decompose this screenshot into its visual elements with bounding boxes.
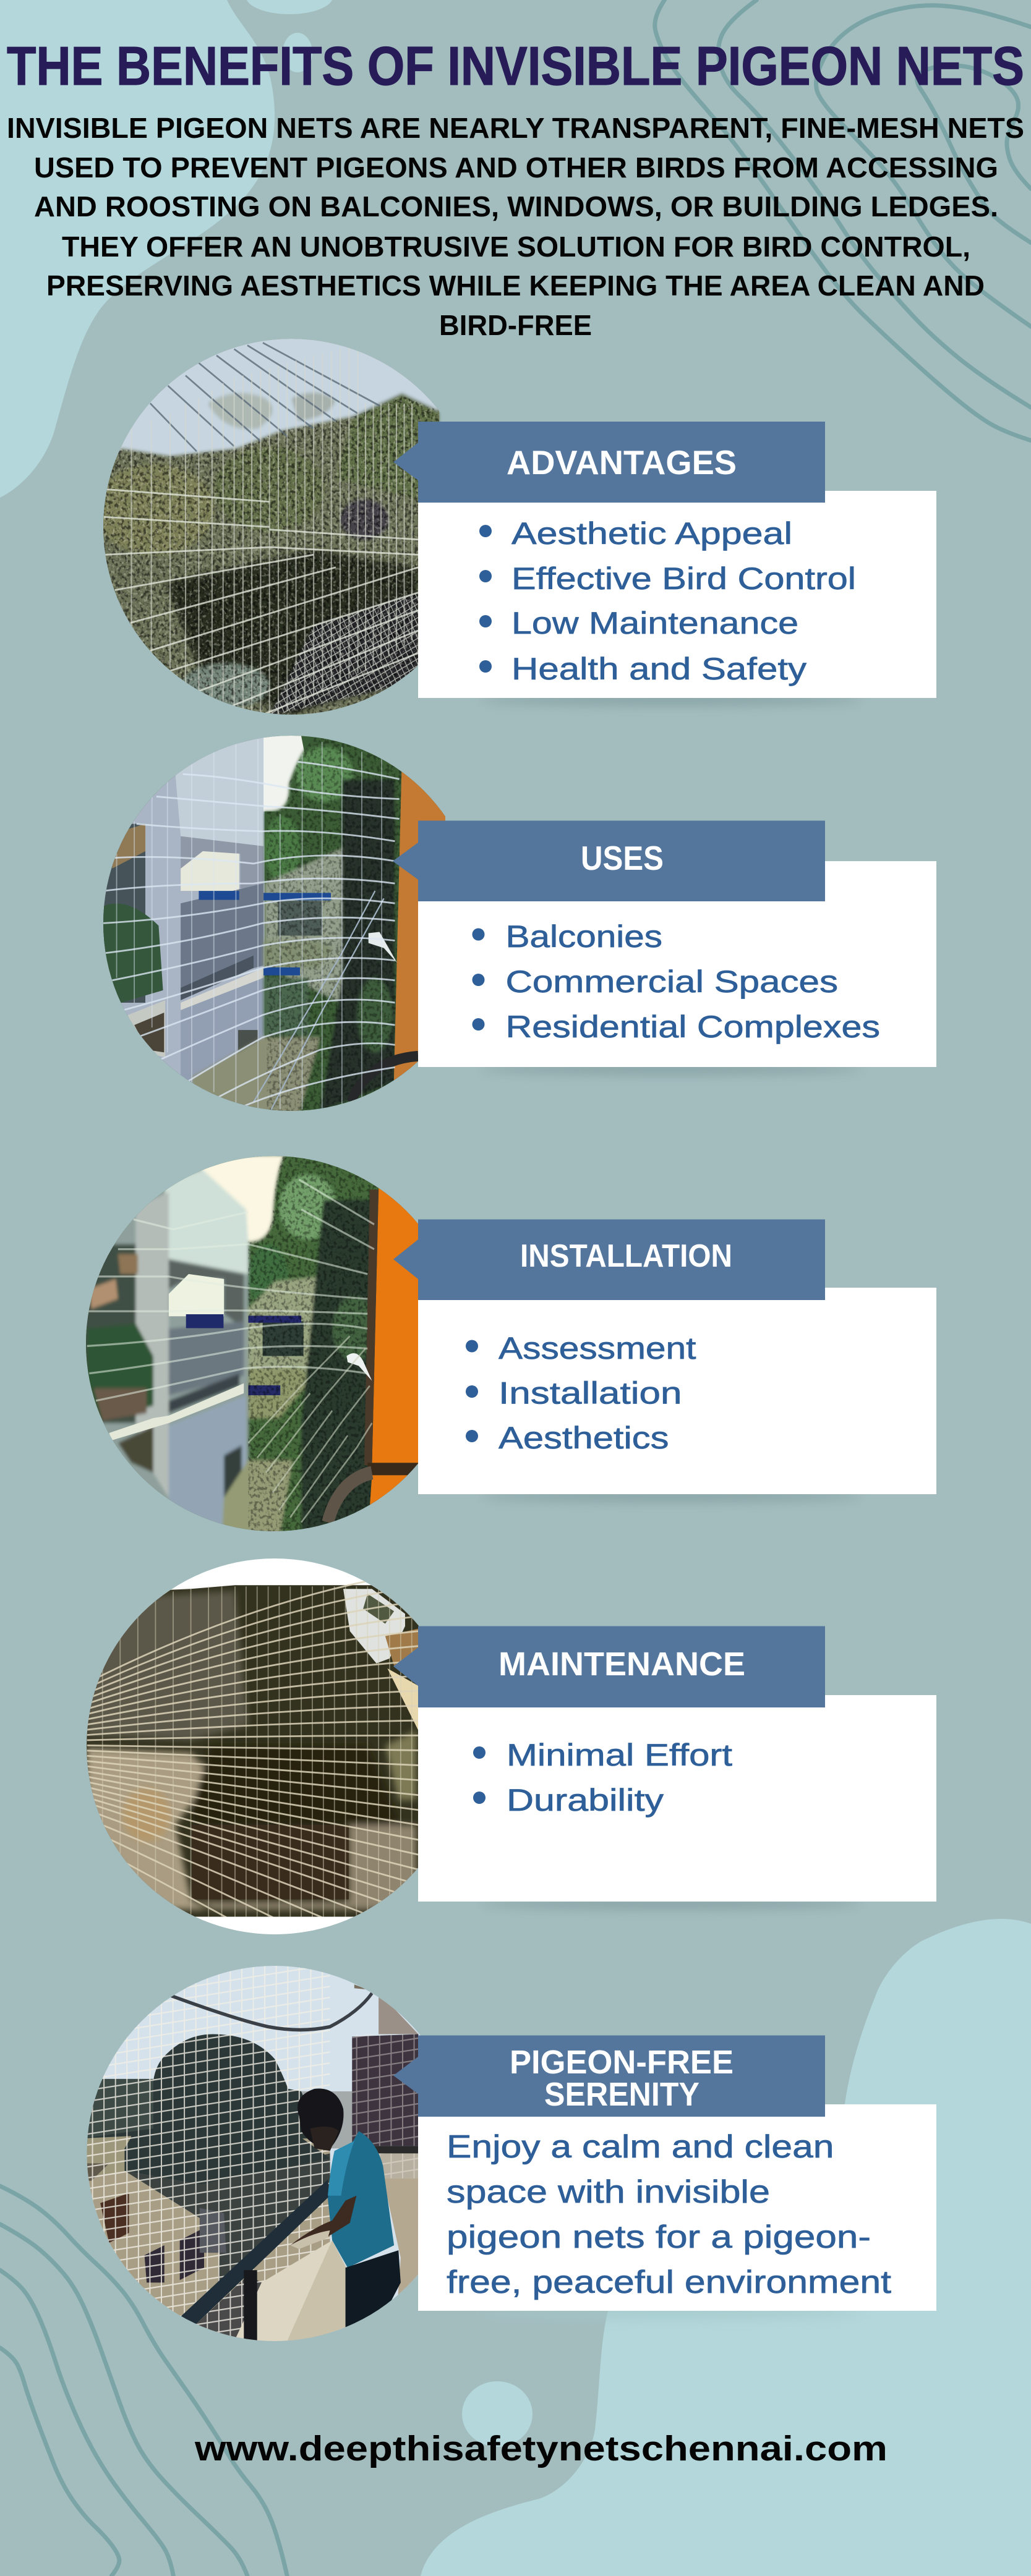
intro paragraph: THEY OFFER AN UNOBTRUSIVE SOLUTION FOR BIRD CONTROL,	[62, 231, 970, 263]
body text: serenity: free, peaceful environment	[447, 2264, 892, 2300]
body text: serenity: Enjoy a calm and clean	[447, 2129, 834, 2165]
ribbon: maintenance heading: MAINTENANCE	[498, 1646, 745, 1683]
card shadow	[479, 694, 863, 705]
photo: net over hillside	[93, 328, 439, 723]
ribbon: serenity heading: SERENITY	[544, 2076, 699, 2113]
ribbon: installation heading: INSTALLATION	[520, 1238, 732, 1274]
list: maintenance	[473, 1738, 732, 1817]
intro paragraph: AND ROOSTING ON BALCONIES, WINDOWS, OR BUILDING LEDGES.	[34, 190, 998, 223]
body text: serenity: pigeon nets for a pigeon-	[447, 2219, 871, 2255]
list: installation: Aesthetics	[498, 1421, 669, 1455]
list: uses: Balconies	[506, 919, 662, 954]
card: advantages list	[418, 491, 936, 698]
list: uses	[473, 919, 880, 1044]
photo: worker installing net on balcony	[80, 1960, 427, 2349]
intro paragraph	[7, 112, 1024, 341]
list: installation: Installation	[498, 1376, 682, 1411]
card shadow	[479, 2307, 863, 2318]
list: maintenance: Durability	[507, 1783, 664, 1817]
list: advantages: Low Maintenance	[511, 606, 798, 640]
ribbon: uses heading: USES	[581, 839, 664, 877]
list: advantages: Aesthetic Appeal	[511, 516, 792, 551]
ribbon: serenity heading: PIGEON-FREE	[510, 2044, 734, 2081]
card: maintenance list	[418, 1695, 936, 1902]
list: uses: Commercial Spaces	[506, 964, 838, 999]
panel: uses	[99, 729, 936, 1119]
list: advantages	[479, 516, 856, 686]
photo: close-up net	[87, 1558, 419, 1934]
body text: serenity: space with invisible	[447, 2174, 770, 2210]
photo: net with orange wall	[80, 1150, 427, 1539]
ribbon: maintenance heading	[393, 1626, 825, 1707]
ribbon: uses heading	[393, 821, 825, 901]
background blob: bottom right	[421, 1919, 1031, 2576]
panel: maintenance	[87, 1558, 936, 1934]
ribbon: advantages heading: ADVANTAGES	[507, 443, 737, 482]
list: installation: Assessment	[498, 1331, 696, 1366]
photo: net over courtyard	[99, 729, 445, 1119]
panel: installation	[80, 1150, 936, 1539]
card shadow	[479, 1490, 863, 1502]
ribbon: advantages heading	[393, 422, 825, 503]
body text: serenity	[447, 2129, 892, 2300]
card shadow	[479, 1898, 863, 1909]
card: uses list	[418, 861, 936, 1067]
card shadow	[479, 1063, 863, 1074]
list: maintenance: Minimal Effort	[507, 1738, 732, 1772]
intro paragraph: BIRD-FREE	[439, 309, 592, 341]
contour lines: bottom left	[0, 2186, 287, 2576]
intro paragraph: PRESERVING AESTHETICS WHILE KEEPING THE AREA CLEAN AND	[46, 270, 985, 302]
ribbon: serenity heading	[393, 2035, 825, 2117]
ribbon: installation heading	[393, 1219, 825, 1300]
card: serenity text	[418, 2104, 936, 2311]
list: uses: Residential Complexes	[506, 1010, 880, 1044]
intro paragraph: INVISIBLE PIGEON NETS ARE NEARLY TRANSPARENT, FINE-MESH NETS	[7, 112, 1024, 144]
panel: advantages	[93, 328, 936, 723]
panel: pigeon-free serenity	[80, 1960, 936, 2349]
intro paragraph: USED TO PREVENT PIGEONS AND OTHER BIRDS FROM ACCESSING	[34, 151, 998, 184]
website url: www.deepthisafetynetschennai.com	[194, 2429, 888, 2468]
list: advantages: Health and Safety	[511, 652, 806, 686]
card: installation list	[418, 1288, 936, 1494]
background blob: top left	[0, 0, 333, 498]
contour lines: top right	[655, 0, 1031, 441]
list: advantages: Effective Bird Control	[511, 561, 856, 596]
list: installation	[466, 1331, 696, 1455]
